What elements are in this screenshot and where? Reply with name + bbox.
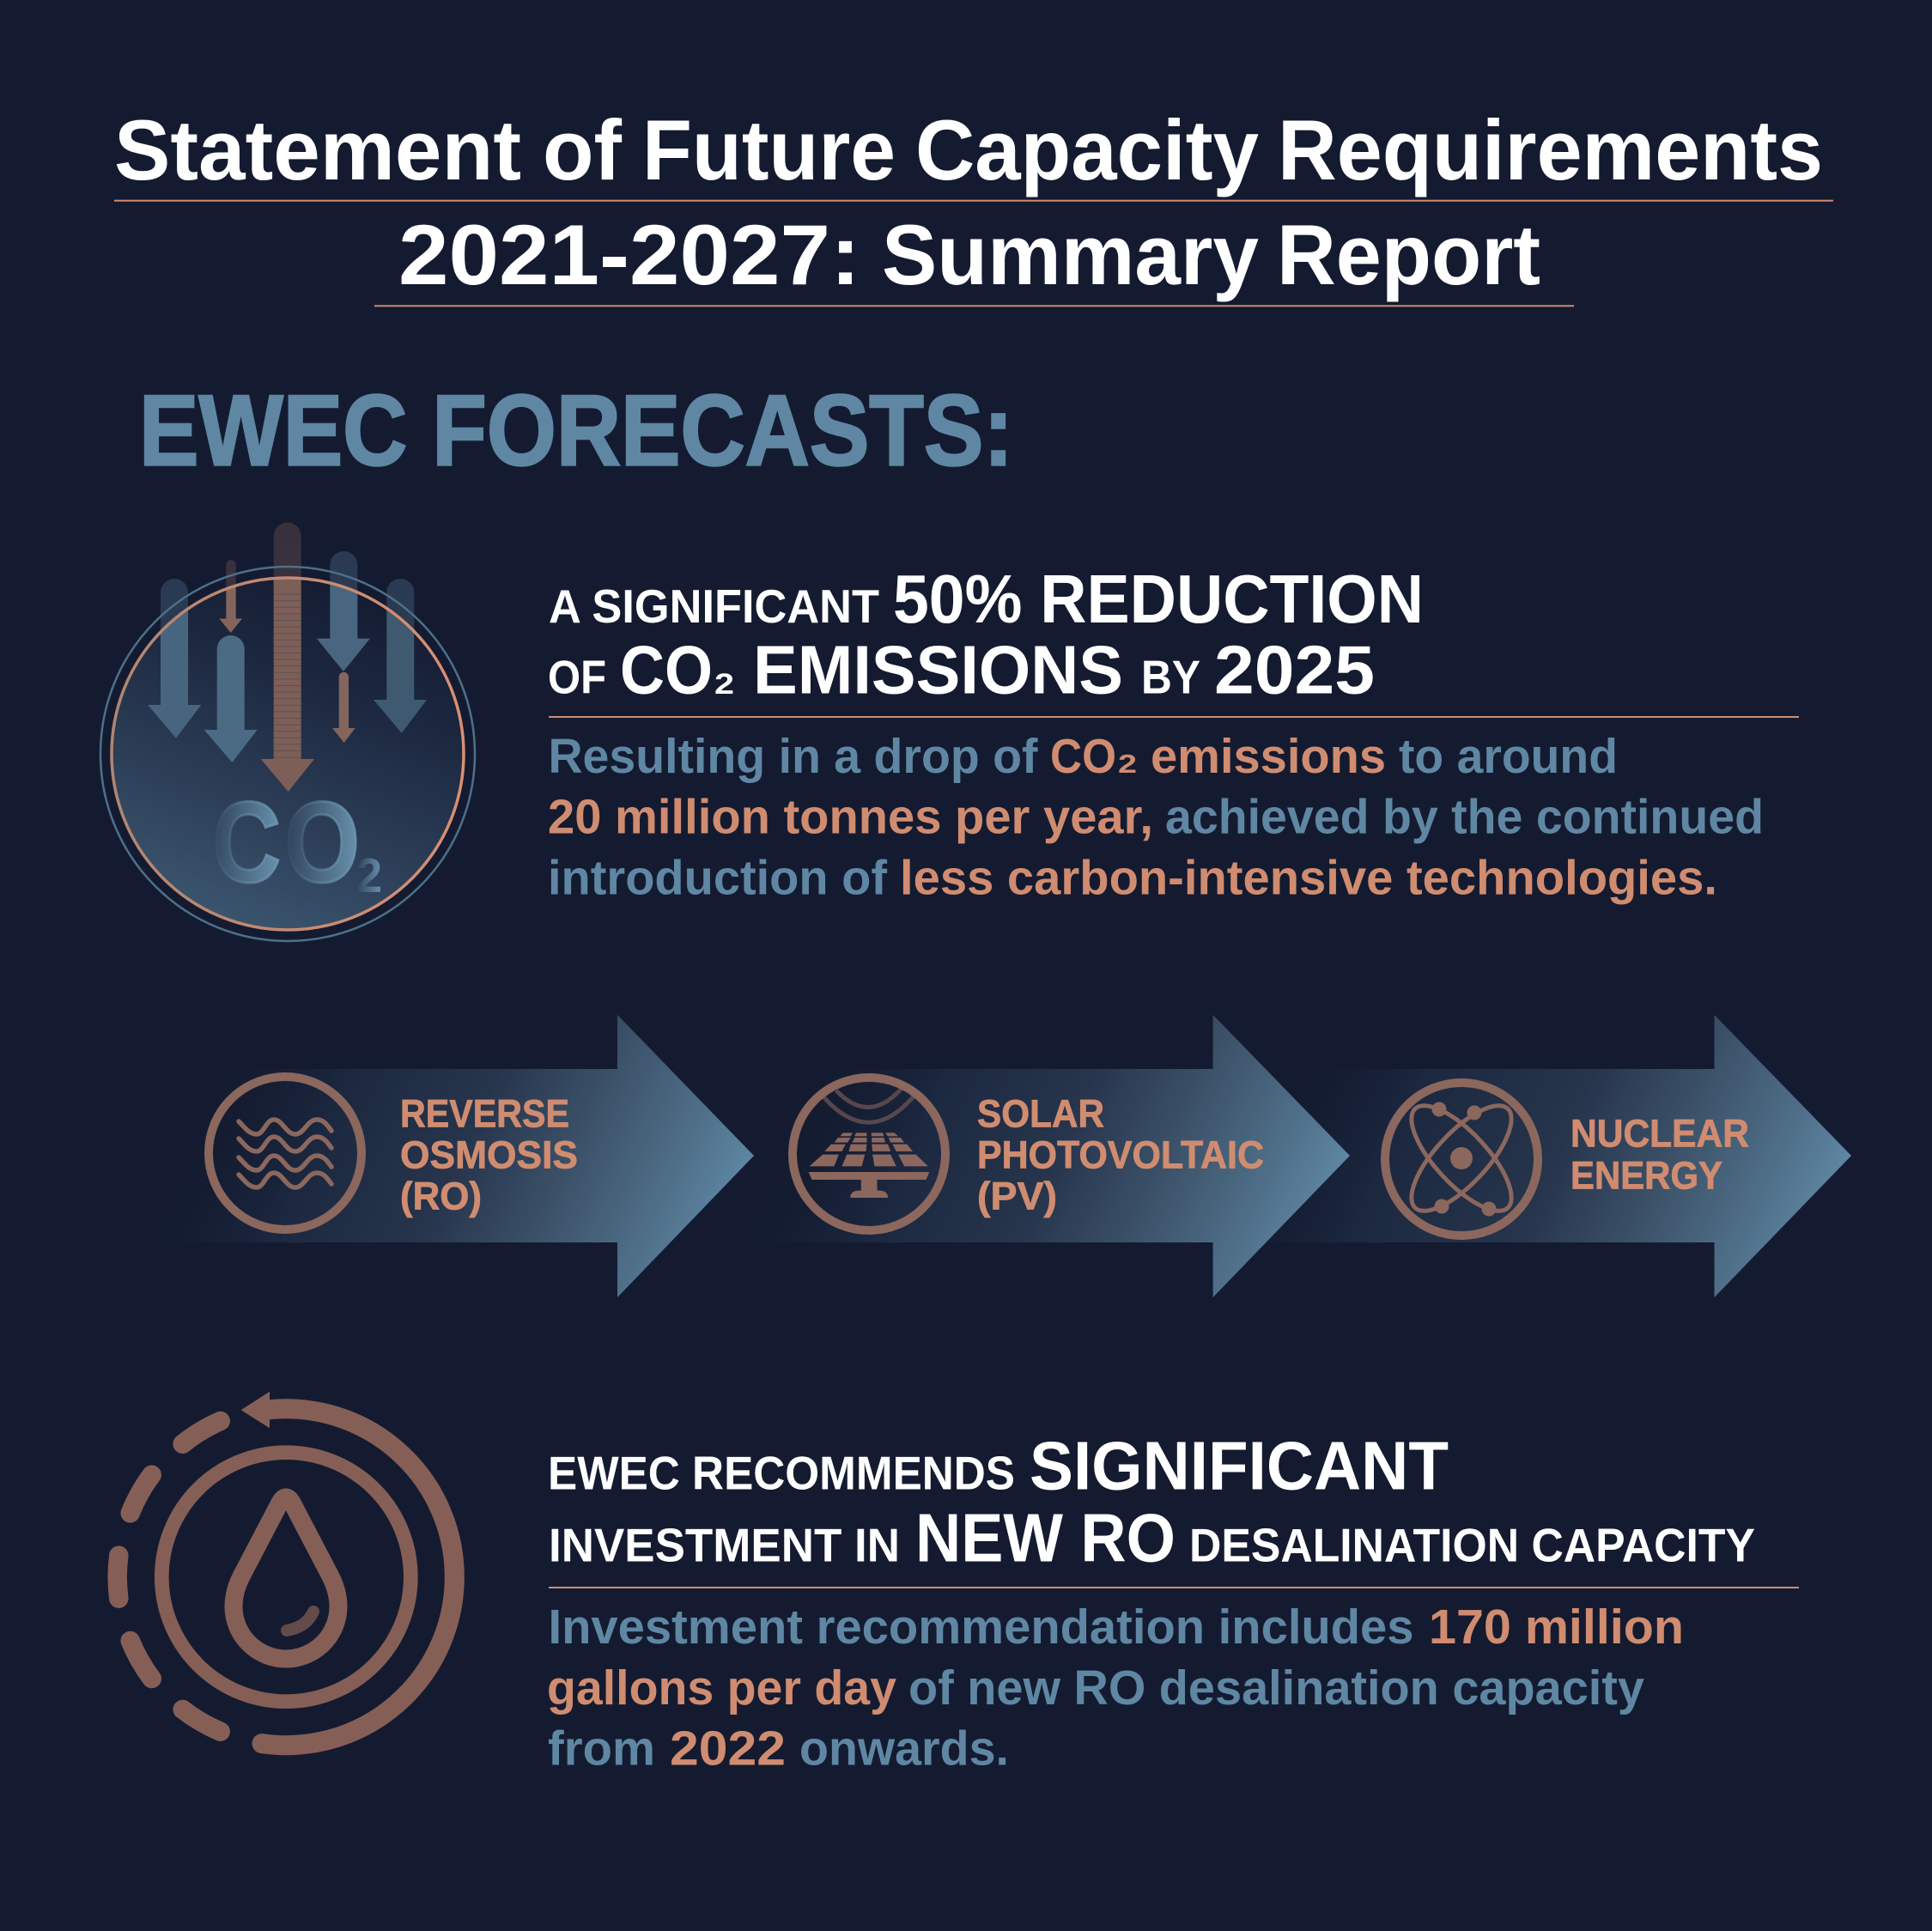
icon: atom xyxy=(1385,1083,1538,1236)
CO2 lettering: O xyxy=(284,779,360,907)
title line 1: Future xyxy=(642,102,896,197)
section: RO investment heading xyxy=(548,1427,1755,1576)
section: CO2 reduction body text: emissions xyxy=(1151,729,1386,784)
section: CO2 reduction body text: CO xyxy=(1050,729,1116,784)
section: CO2 reduction heading: EMISSIONS xyxy=(753,632,1123,707)
title line 1: of xyxy=(543,102,623,197)
section: RO investment body text: of new RO desalination capacity xyxy=(908,1661,1644,1715)
section: CO2 reduction body text: Resulting in a drop of xyxy=(548,729,1038,784)
section: CO2 reduction heading xyxy=(548,561,1424,707)
CO2 lettering: 2 xyxy=(356,848,382,903)
section: RO investment heading: DESALINATION CAPACITY xyxy=(1189,1518,1755,1571)
section: CO2 reduction body text: 2 xyxy=(1118,749,1137,779)
section: RO investment body text: 170 million xyxy=(1429,1600,1684,1655)
arrow: solar photovoltaic xyxy=(725,1015,1350,1297)
section: CO2 reduction heading: CO xyxy=(620,632,713,707)
CO2 disc xyxy=(112,578,464,930)
title line 1: Capacity xyxy=(915,102,1259,197)
title line 1: Statement xyxy=(114,102,521,197)
icon: water drop with cycle ring xyxy=(118,1392,454,1746)
section: CO2 reduction body text: 20 million tonnes per year, xyxy=(548,790,1153,845)
section: CO2 reduction heading: 50% REDUCTION xyxy=(893,561,1424,637)
label: nuclear energy: NUCLEAR xyxy=(1571,1112,1749,1156)
section: CO2 reduction body text: less carbon-intensive technologies. xyxy=(900,851,1717,906)
section: RO investment body text: from xyxy=(548,1722,655,1776)
section: CO2 reduction body text xyxy=(548,729,1764,906)
title line 1 xyxy=(114,102,1823,197)
title line 1: Requirements xyxy=(1278,102,1823,197)
arrow: reverse osmosis xyxy=(129,1015,754,1297)
section: RO investment body text: gallons per day xyxy=(547,1661,896,1715)
CO2 lettering: C xyxy=(212,779,281,907)
title line 2: Report xyxy=(1277,207,1540,302)
section: RO investment body text: 2022 xyxy=(670,1722,786,1776)
section: CO2 reduction body text: introduction of xyxy=(548,851,888,906)
section: RO investment heading: NEW RO xyxy=(915,1499,1176,1576)
label: nuclear energy xyxy=(1571,1112,1749,1198)
title line 2 xyxy=(398,207,1540,302)
section: RO investment body text: onwards. xyxy=(799,1722,1009,1776)
icon: solar panel xyxy=(793,1078,945,1230)
section: CO2 reduction heading: BY xyxy=(1141,651,1200,704)
section: CO2 reduction heading: 2 xyxy=(714,668,734,701)
label: solar photovoltaic: (PV) xyxy=(977,1175,1057,1218)
section: CO2 reduction heading: OF xyxy=(548,651,606,704)
section: RO investment body text xyxy=(547,1600,1684,1776)
section: CO2 reduction heading: A SIGNIFICANT xyxy=(549,580,879,633)
icon: water waves xyxy=(209,1077,361,1230)
CO2 lettering xyxy=(212,779,382,907)
label: solar photovoltaic xyxy=(977,1092,1264,1218)
section: CO2 reduction body text: to around xyxy=(1399,729,1618,784)
icon: CO2 reduction xyxy=(100,523,475,941)
section: CO2 reduction heading: 2025 xyxy=(1214,632,1375,707)
label: reverse osmosis: REVERSE xyxy=(400,1092,569,1136)
label: reverse osmosis: (RO) xyxy=(400,1175,482,1218)
section: RO investment body text: Investment recommendation includes xyxy=(548,1600,1413,1655)
title line 2: 2021-2027: xyxy=(398,207,860,302)
title line 2: Summary xyxy=(882,207,1259,302)
arrow: nuclear energy xyxy=(1228,1015,1851,1297)
label: solar photovoltaic: SOLAR xyxy=(977,1092,1104,1136)
section: RO investment heading: INVESTMENT IN xyxy=(549,1518,900,1571)
section: RO investment heading: EWEC RECOMMENDS xyxy=(548,1446,1015,1499)
label: nuclear energy: ENERGY xyxy=(1571,1154,1722,1198)
label: solar photovoltaic: PHOTOVOLTAIC xyxy=(977,1133,1264,1177)
section: CO2 reduction body text: achieved by the continued xyxy=(1165,790,1764,845)
heading: EWEC forecasts: EWEC FORECASTS: xyxy=(139,374,1013,486)
label: reverse osmosis: OSMOSIS xyxy=(400,1133,578,1177)
title xyxy=(114,102,1833,307)
label: reverse osmosis xyxy=(400,1092,578,1218)
section: RO investment heading: SIGNIFICANT xyxy=(1030,1427,1449,1504)
